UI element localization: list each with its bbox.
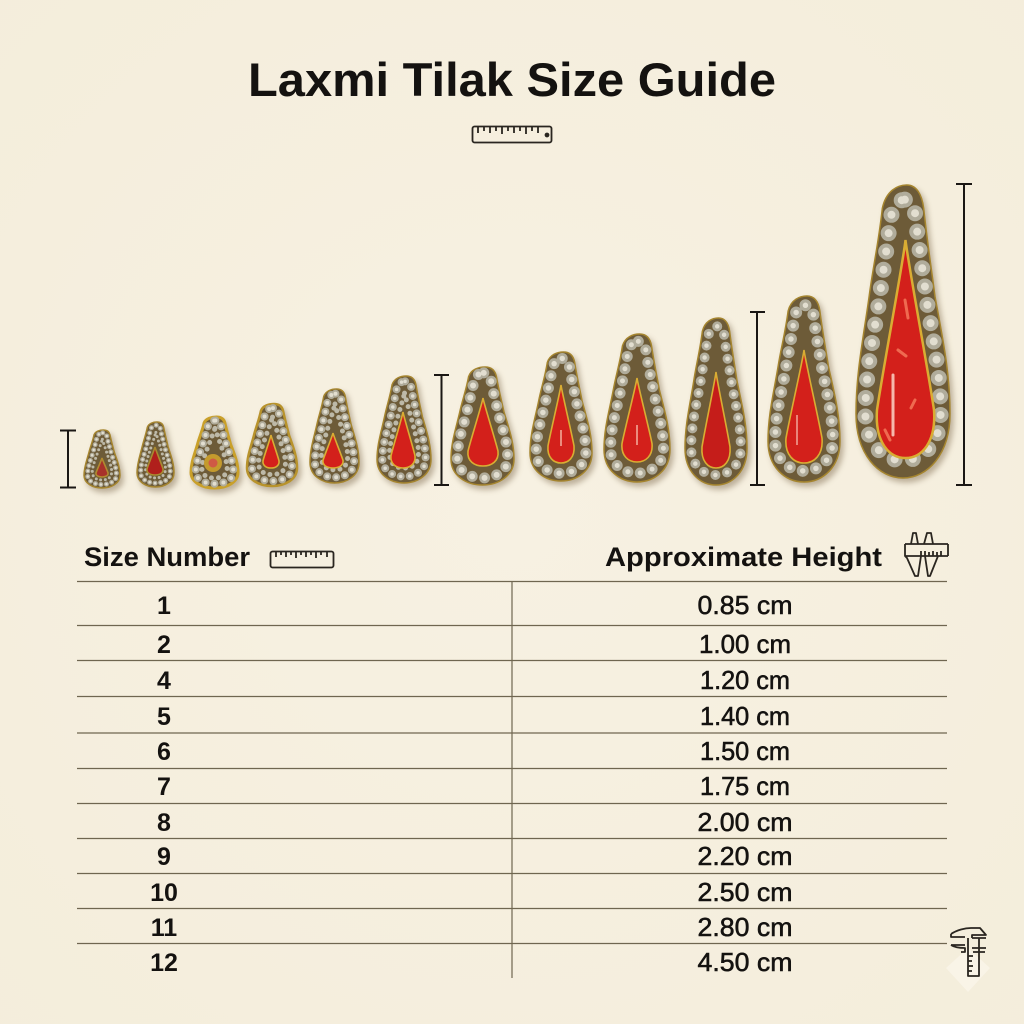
row size 5: 5 bbox=[157, 703, 171, 731]
measure bar: large bbox=[750, 312, 765, 485]
icon: caliper bbox=[905, 533, 948, 576]
row size 4: 4 bbox=[157, 667, 171, 695]
size table bbox=[77, 533, 948, 978]
icon: corner caliper with glow bbox=[946, 928, 990, 992]
row size 8: 2.00 cm bbox=[698, 807, 792, 837]
icon: header ruler bbox=[270, 552, 334, 568]
row size 8: 8 bbox=[157, 809, 171, 837]
row size 12: 12 bbox=[150, 949, 178, 977]
row size 7: 7 bbox=[157, 773, 171, 801]
jewel size 10 bbox=[685, 318, 747, 485]
row size 9: 9 bbox=[157, 843, 171, 871]
row size 2: 2 bbox=[157, 631, 171, 659]
row size 12 bbox=[150, 947, 792, 977]
gold centre setting bbox=[204, 454, 222, 472]
header: size number: Size Number bbox=[84, 542, 250, 572]
jewel size 1 bbox=[84, 430, 120, 488]
row size 8 bbox=[157, 807, 792, 837]
icon: title ruler bbox=[472, 126, 552, 142]
row size 9: 2.20 cm bbox=[698, 841, 792, 871]
row size 5: 1.40 cm bbox=[700, 701, 790, 731]
row size 1 bbox=[157, 590, 792, 620]
row size 2: 1.00 cm bbox=[699, 629, 791, 659]
row size 2 bbox=[157, 629, 791, 659]
row size 4 bbox=[157, 665, 790, 695]
row size 1: 0.85 cm bbox=[698, 590, 792, 620]
row size 10: 10 bbox=[150, 879, 178, 907]
jewel size 5 bbox=[310, 389, 359, 483]
row size 6: 6 bbox=[157, 738, 171, 766]
row size 9 bbox=[157, 841, 792, 871]
title: Laxmi Tilak Size Guide bbox=[248, 53, 776, 106]
row size 10: 2.50 cm bbox=[698, 877, 792, 907]
jewel size 4 bbox=[247, 404, 297, 486]
row size 12: 4.50 cm bbox=[698, 947, 792, 977]
table rules bbox=[77, 581, 947, 978]
jewel size 7 bbox=[451, 367, 514, 485]
row size 7: 1.75 cm bbox=[700, 771, 790, 801]
header: approximate height: Approximate Height bbox=[605, 542, 882, 572]
row size 7 bbox=[157, 771, 790, 801]
jewel size 8 bbox=[530, 352, 592, 481]
jewel size 11 bbox=[768, 296, 840, 482]
jewel size 2 bbox=[137, 422, 174, 487]
row size 11: 2.80 cm bbox=[698, 912, 792, 942]
row size 1: 1 bbox=[157, 592, 171, 620]
row size 4: 1.20 cm bbox=[700, 665, 790, 695]
measure bar: medium bbox=[434, 375, 449, 485]
row size 11 bbox=[151, 912, 792, 942]
jewel size 12 bbox=[856, 185, 950, 478]
measure bar: small bbox=[60, 430, 76, 488]
row size 5 bbox=[157, 701, 790, 731]
row size 6: 1.50 cm bbox=[700, 736, 790, 766]
jewel row bbox=[84, 185, 950, 488]
jewel size 9 bbox=[604, 334, 670, 482]
jewel size 3 bbox=[191, 417, 238, 488]
row size 10 bbox=[150, 877, 792, 907]
jewel size 6 bbox=[377, 376, 431, 483]
row size 6 bbox=[157, 736, 790, 766]
row size 11: 11 bbox=[151, 914, 177, 942]
measure bar: extra large bbox=[956, 184, 972, 485]
